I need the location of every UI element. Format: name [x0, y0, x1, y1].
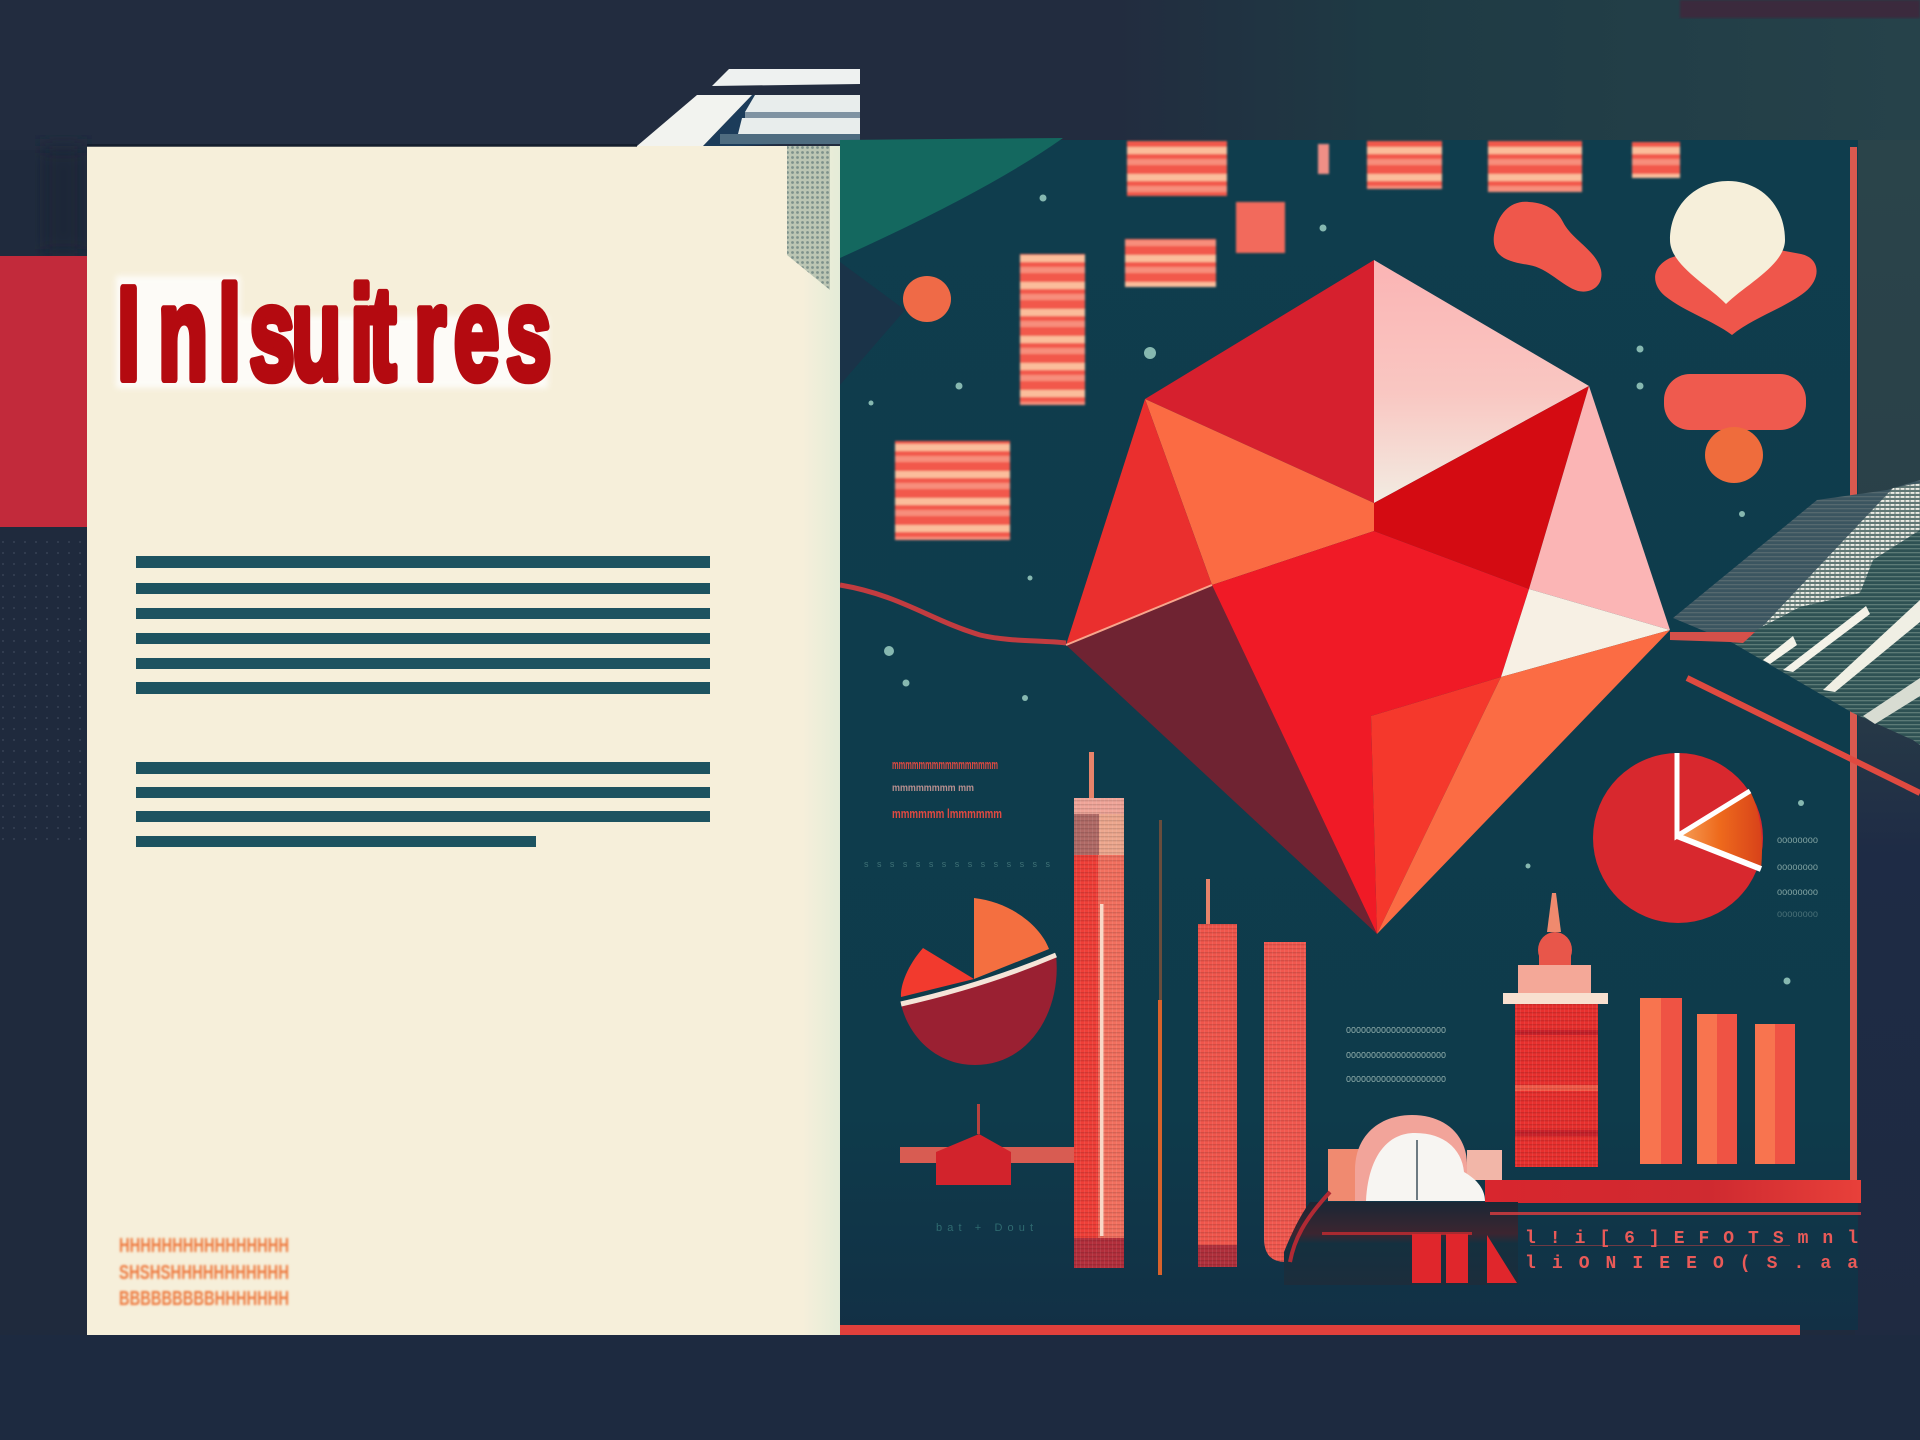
diagonal red line [1687, 678, 1920, 793]
red bottom rule [840, 1325, 1800, 1335]
red temple tower [1503, 893, 1608, 1167]
centre caption lines: oooooooooooooooooooo [1346, 1073, 1446, 1085]
body text lines block one [136, 556, 710, 694]
small text labels left: mmmmmmmmmmmmmmmm [892, 757, 998, 772]
centre caption lines [1346, 1024, 1446, 1085]
coral blob [1494, 202, 1601, 292]
small text labels left: mmmmmmmm mm [892, 783, 974, 794]
striped red blocks [895, 141, 1680, 540]
left red block [0, 256, 87, 527]
dome building [1328, 1115, 1502, 1201]
coded red table text: l i O N I E E O ( S . a a [1525, 1254, 1858, 1274]
tower three [1264, 942, 1306, 1262]
body text lines block two [136, 762, 710, 847]
coded red table text [1490, 1212, 1861, 1274]
cream report panel [87, 144, 840, 1335]
tall tower one [1074, 752, 1124, 1268]
orange circle under pill [1705, 427, 1763, 483]
coral pill [1664, 374, 1806, 430]
pie legend text: oooooooo [1777, 909, 1818, 920]
coded red table text: l ! i [ 6 ] E F O T S m n l [1525, 1229, 1858, 1249]
small text labels left: mmmmmm lmmmmmm [892, 806, 1002, 821]
thin orange line [1158, 820, 1162, 1275]
panel dotted strip [787, 146, 830, 290]
teal corner triangle [840, 138, 1063, 258]
polyhedron gem [1066, 260, 1670, 934]
orange footer text: HHHHHHHHHHHHHHHH [119, 1235, 289, 1257]
small text labels left [864, 757, 1050, 869]
curved red connector left [840, 585, 1066, 643]
dark base building [1284, 1192, 1518, 1285]
right dark dashboard panel [840, 140, 1858, 1330]
connector right [1670, 632, 1755, 643]
left pie chart [901, 898, 1057, 1065]
orange circle [903, 276, 951, 322]
small teal marks [868, 194, 1804, 984]
tiny caption bottom: bat + Dout [936, 1222, 1033, 1234]
red vertical line right [1850, 147, 1857, 1182]
centre caption lines: oooooooooooooooooooo [1346, 1049, 1446, 1061]
title: Inlsuitres [117, 261, 551, 408]
orange footer text: SHSHSHHHHHHHHHHH [119, 1262, 289, 1284]
small text labels left: s s s s s s s s s s s s s s s [864, 859, 1050, 869]
textured grey diagonal block [1673, 480, 1920, 745]
small red house [900, 1104, 1074, 1185]
orange footer text: BBBBBBBBBHHHHHHH [119, 1288, 289, 1310]
heart and cream circle [1655, 181, 1817, 335]
pie legend text: oooooooo [1777, 835, 1818, 846]
right pie chart [1593, 753, 1763, 923]
bar chart [1640, 998, 1795, 1164]
centre caption lines: oooooooooooooooooooo [1346, 1024, 1446, 1036]
pie legend text: oooooooo [1777, 862, 1818, 873]
top white stripes graphic [637, 69, 860, 146]
tower two [1198, 879, 1237, 1267]
dark corner wedge [840, 262, 905, 385]
pie legend text [1777, 835, 1818, 920]
pie legend text: oooooooo [1777, 887, 1818, 898]
left dotted texture [0, 540, 85, 845]
red band [1485, 1180, 1861, 1203]
orange footer text [119, 1235, 289, 1310]
